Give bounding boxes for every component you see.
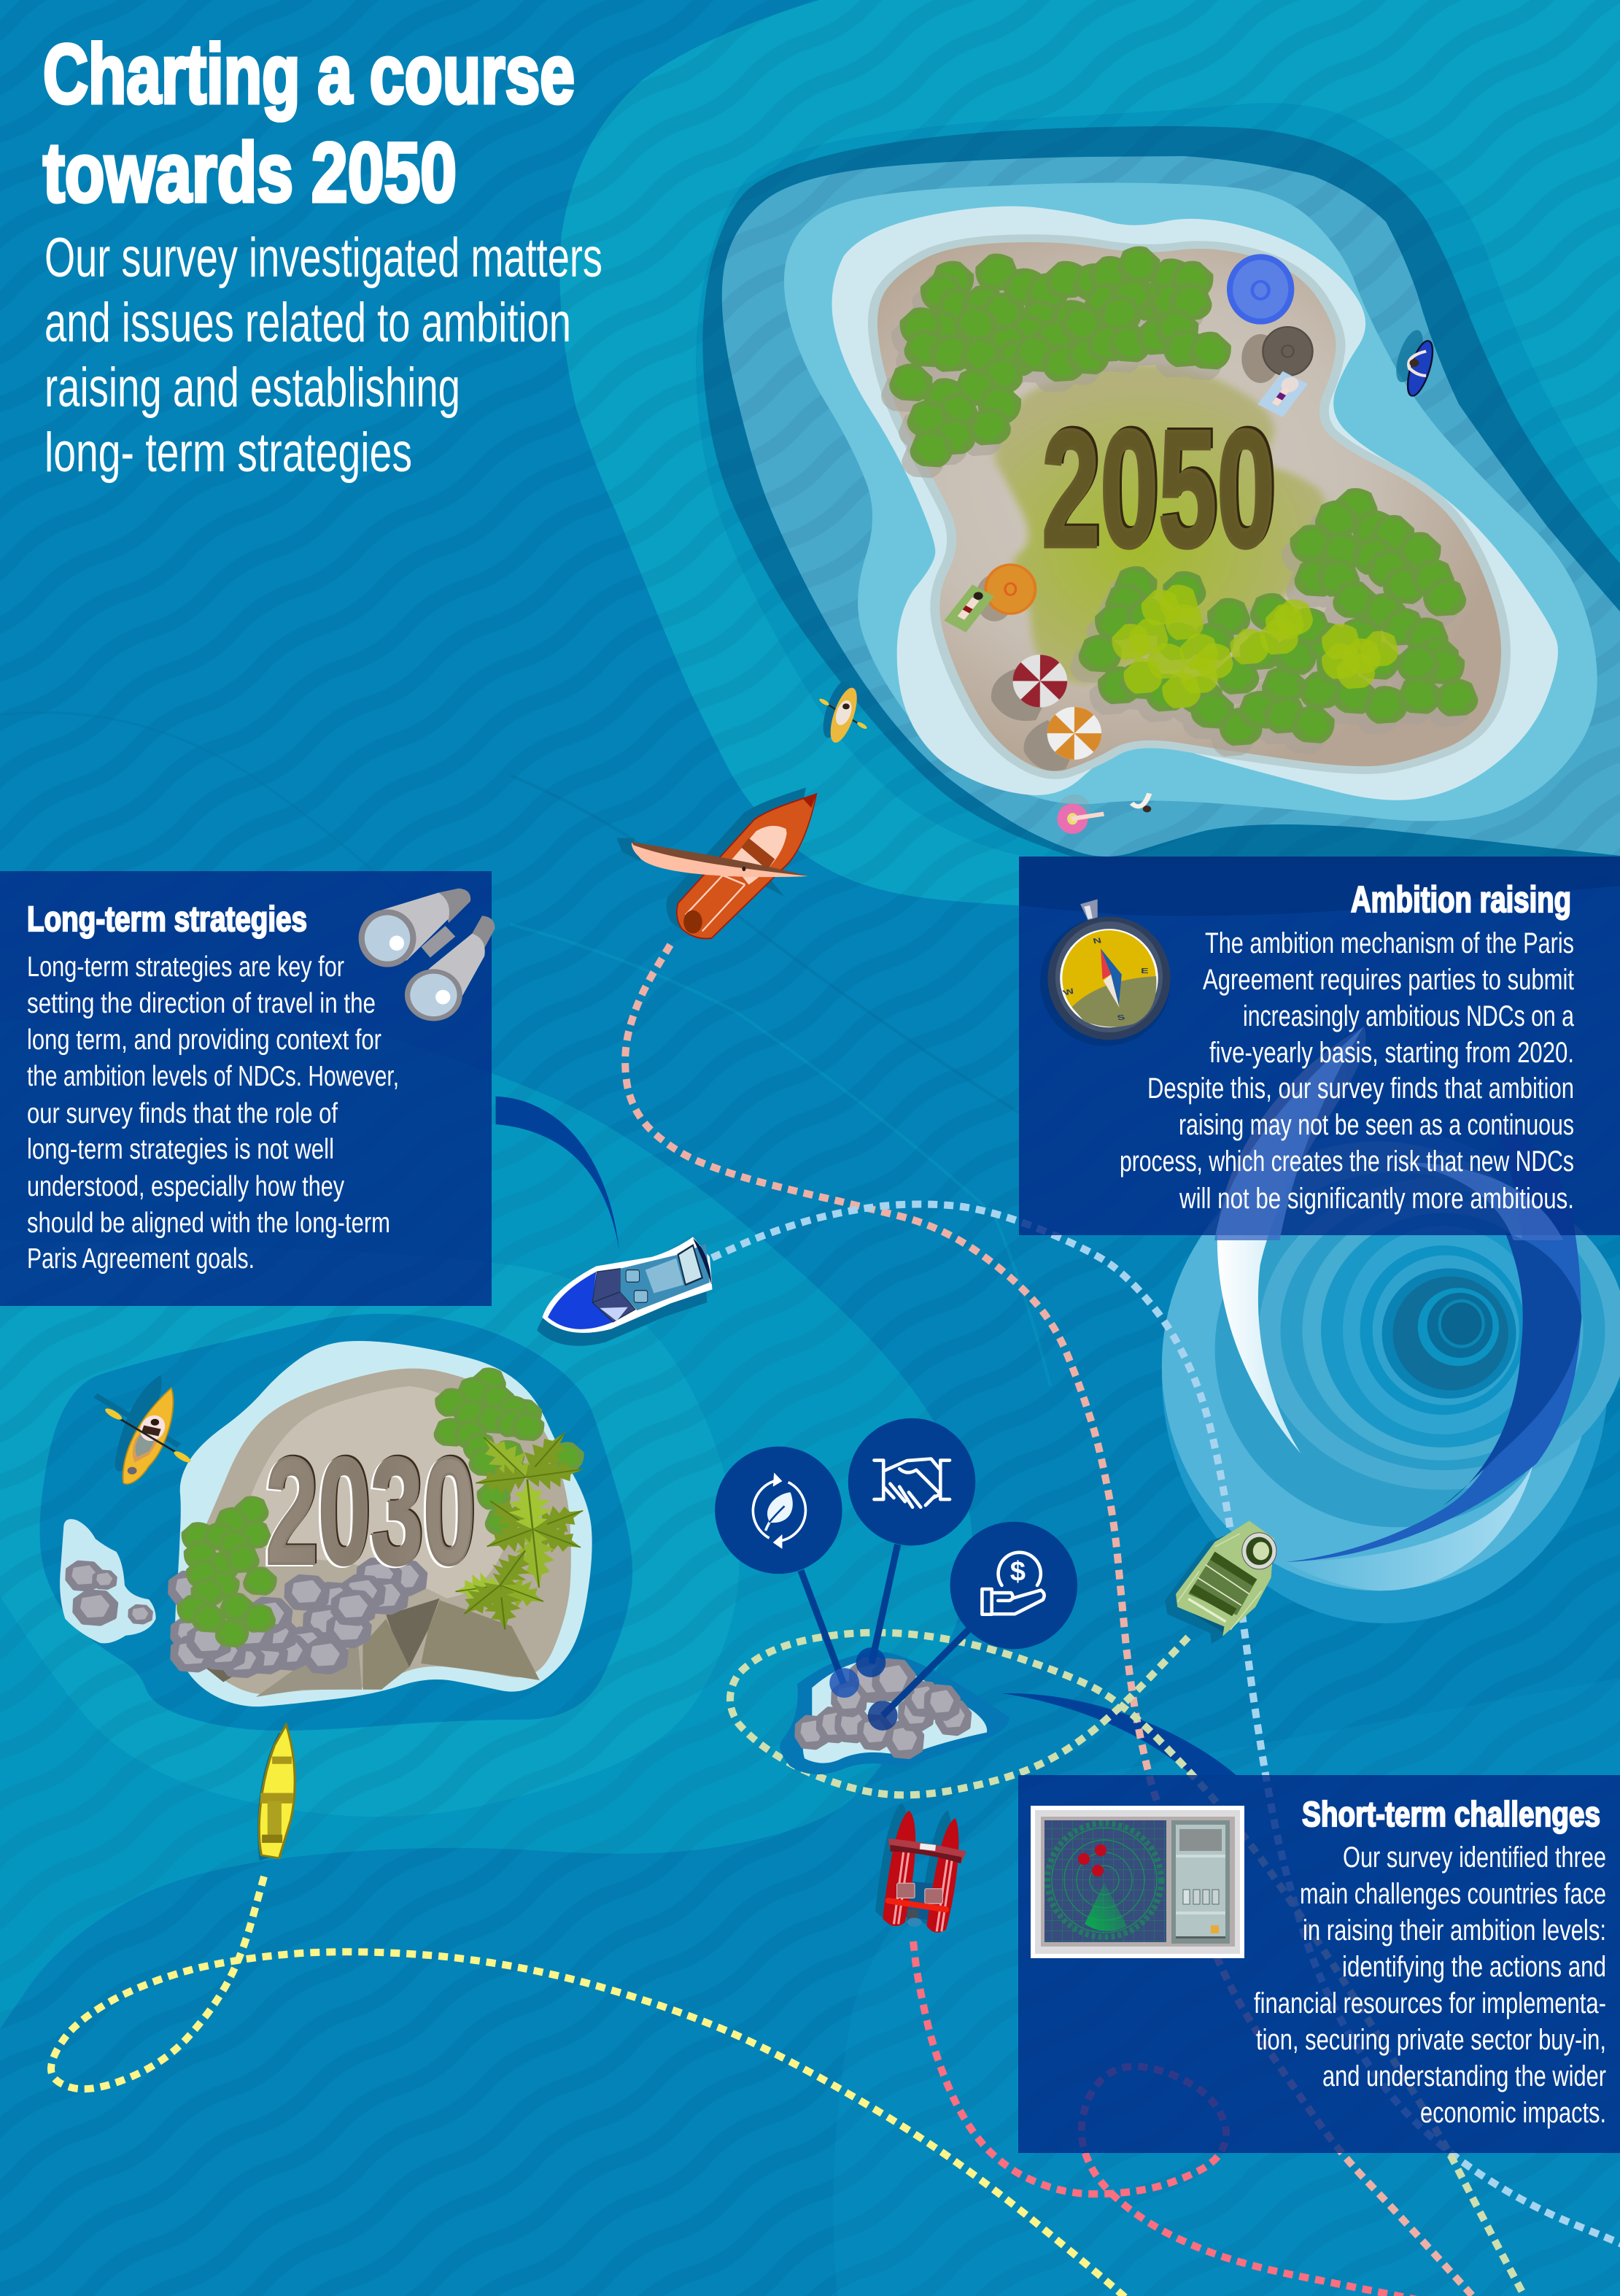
trees: north grove shadow (881, 257, 1222, 478)
title: towards 2050 (43, 126, 457, 220)
water: dark ring (702, 126, 1620, 865)
water: current lines (0, 713, 1050, 1386)
swimmer (1131, 793, 1151, 813)
trees: south grove (1079, 488, 1478, 746)
water: lower right shallows (833, 1678, 1620, 2296)
trees: right clump (434, 1367, 584, 1536)
icon: compass: S (1116, 1013, 1126, 1022)
radar display (1031, 1806, 1244, 1958)
body text: long term, and providing context for (27, 1024, 381, 1056)
water: deep ring around 2030 island (39, 1314, 632, 1731)
island: grass (994, 363, 1328, 684)
whirlpool: blue swirl (1285, 1116, 1581, 1562)
whirlpool: white swirl (1217, 1027, 1366, 1453)
body text (27, 951, 399, 1275)
water: lagoon around 2050 island (560, 0, 1620, 911)
umbrella: dark brown (1241, 327, 1313, 383)
icon: hand holding coin (950, 1522, 1077, 1649)
sunbather: green towel (944, 584, 994, 633)
body text: understood, especially how they (27, 1171, 344, 1202)
lagoon: turquoise shallows (784, 182, 1597, 821)
subtitle (44, 227, 602, 484)
umbrella: blue (1227, 254, 1294, 325)
island: 2050 (784, 182, 1597, 834)
boat: red catamaran (875, 1803, 966, 1933)
trees: yellow-green canopy (1112, 584, 1399, 708)
umbrella: red and white (991, 654, 1067, 721)
umbrella: orange and white (1024, 707, 1101, 770)
body text: Paris Agreement goals. (27, 1243, 255, 1275)
palm trees (450, 1423, 592, 1631)
panel background (1019, 857, 1620, 1235)
island: beach sand (872, 239, 1505, 776)
boat: orange rowing boat (616, 787, 816, 938)
rocks (171, 1561, 424, 1675)
raft life ring (1242, 1533, 1276, 1569)
panel: long-term strategies (0, 871, 495, 1306)
island inner plateau (242, 1386, 505, 1599)
boat: blue speedboat (537, 1237, 713, 1346)
water: band around 2030 island (0, 1013, 972, 2029)
swimmer on pink float (1057, 795, 1104, 834)
icon: hand holding coin: $ (1010, 1555, 1026, 1587)
icon: binoculars (359, 889, 495, 1021)
icon: compass: W (1061, 986, 1077, 997)
subtitle: raising and establishing (44, 357, 460, 419)
water: shallow ring (722, 156, 1620, 857)
label: 2050 on island: 2050 (1042, 395, 1275, 582)
cliff faces (205, 1599, 540, 1697)
trees: left clump (177, 1496, 277, 1647)
surfer on blue board (1391, 328, 1438, 398)
pin stems (801, 1545, 970, 1716)
island: small islet (60, 1519, 156, 1643)
central islet with pins (715, 1418, 1077, 1774)
sunbather: blue towel (1257, 371, 1308, 417)
subtitle: and issues related to ambition (44, 292, 571, 354)
lagoon: pale surf (832, 206, 1558, 800)
island: 2030 (171, 1341, 592, 1706)
label: 2030 on island: 2030 (266, 1427, 476, 1596)
kayaker near shore (818, 679, 868, 745)
panel background (0, 871, 492, 1306)
islet rocks (69, 1563, 151, 1623)
kayaker beside 2030 island (96, 1375, 193, 1484)
body text: long-term strategies is not well (27, 1134, 334, 1165)
panel background (1018, 1775, 1620, 2153)
route: blue dashed path from speedboat (712, 1204, 1620, 2250)
route: coral dashed path from catamaran (913, 1941, 1428, 2296)
island sand (188, 1369, 571, 1694)
heading: Long-term strategies (27, 900, 307, 939)
trees: north grove (889, 246, 1231, 467)
connector: long-term panel to speedboat (496, 1097, 619, 1250)
route: yellow dashed path from kayak (51, 1876, 1138, 2296)
icon: compass: N (1092, 936, 1102, 946)
icon: compass: E (1141, 967, 1149, 975)
panel: ambition raising (1019, 857, 1620, 1240)
islet rocks (797, 1661, 969, 1756)
body text: the ambition levels of NDCs. However, (27, 1061, 399, 1092)
body text: setting the direction of travel in the (27, 988, 376, 1019)
boat: green raft (1165, 1520, 1276, 1644)
title: Charting a course (43, 28, 575, 121)
icon: leaf cycle (715, 1447, 842, 1574)
icon: handshake (848, 1418, 975, 1545)
body text (1120, 927, 1575, 1215)
connector: short-term panel to islet (1001, 1693, 1236, 1775)
radar control unit (1171, 1820, 1230, 1944)
whirlpool (1162, 1027, 1620, 1623)
route: pink dashed path from rowing boat (625, 945, 1473, 2296)
pin heads (829, 1647, 898, 1731)
title (43, 28, 575, 220)
umbrella: orange (975, 565, 1035, 622)
body text (1254, 1841, 1606, 2129)
subtitle: Our survey investigated matters (44, 227, 602, 289)
islet shape (803, 1658, 987, 1763)
radar screen (1045, 1820, 1166, 1942)
whirlpool: lower pale swirl (1285, 1464, 1533, 1590)
water: shelf ring (696, 103, 1620, 865)
icon: compass (1040, 900, 1171, 1046)
islet halo (780, 1653, 1009, 1774)
body text: our survey finds that the role of (27, 1098, 338, 1129)
panel: short-term challenges (1018, 1775, 1620, 2153)
islet shape (60, 1519, 156, 1643)
boat: yellow kayak (257, 1725, 295, 1860)
water: light ring around 2030 island (0, 1240, 739, 1817)
island surf (175, 1341, 592, 1706)
body text: should be aligned with the long-term (27, 1207, 390, 1239)
panel: lagoon and whirlpool shading (1019, 857, 1620, 1240)
route: green dashed path from raft (730, 1633, 1524, 2296)
body text: Long-term strategies are key for (27, 951, 344, 983)
subtitle: long- term strategies (44, 422, 412, 484)
trees: south grove shadow (1070, 499, 1470, 757)
